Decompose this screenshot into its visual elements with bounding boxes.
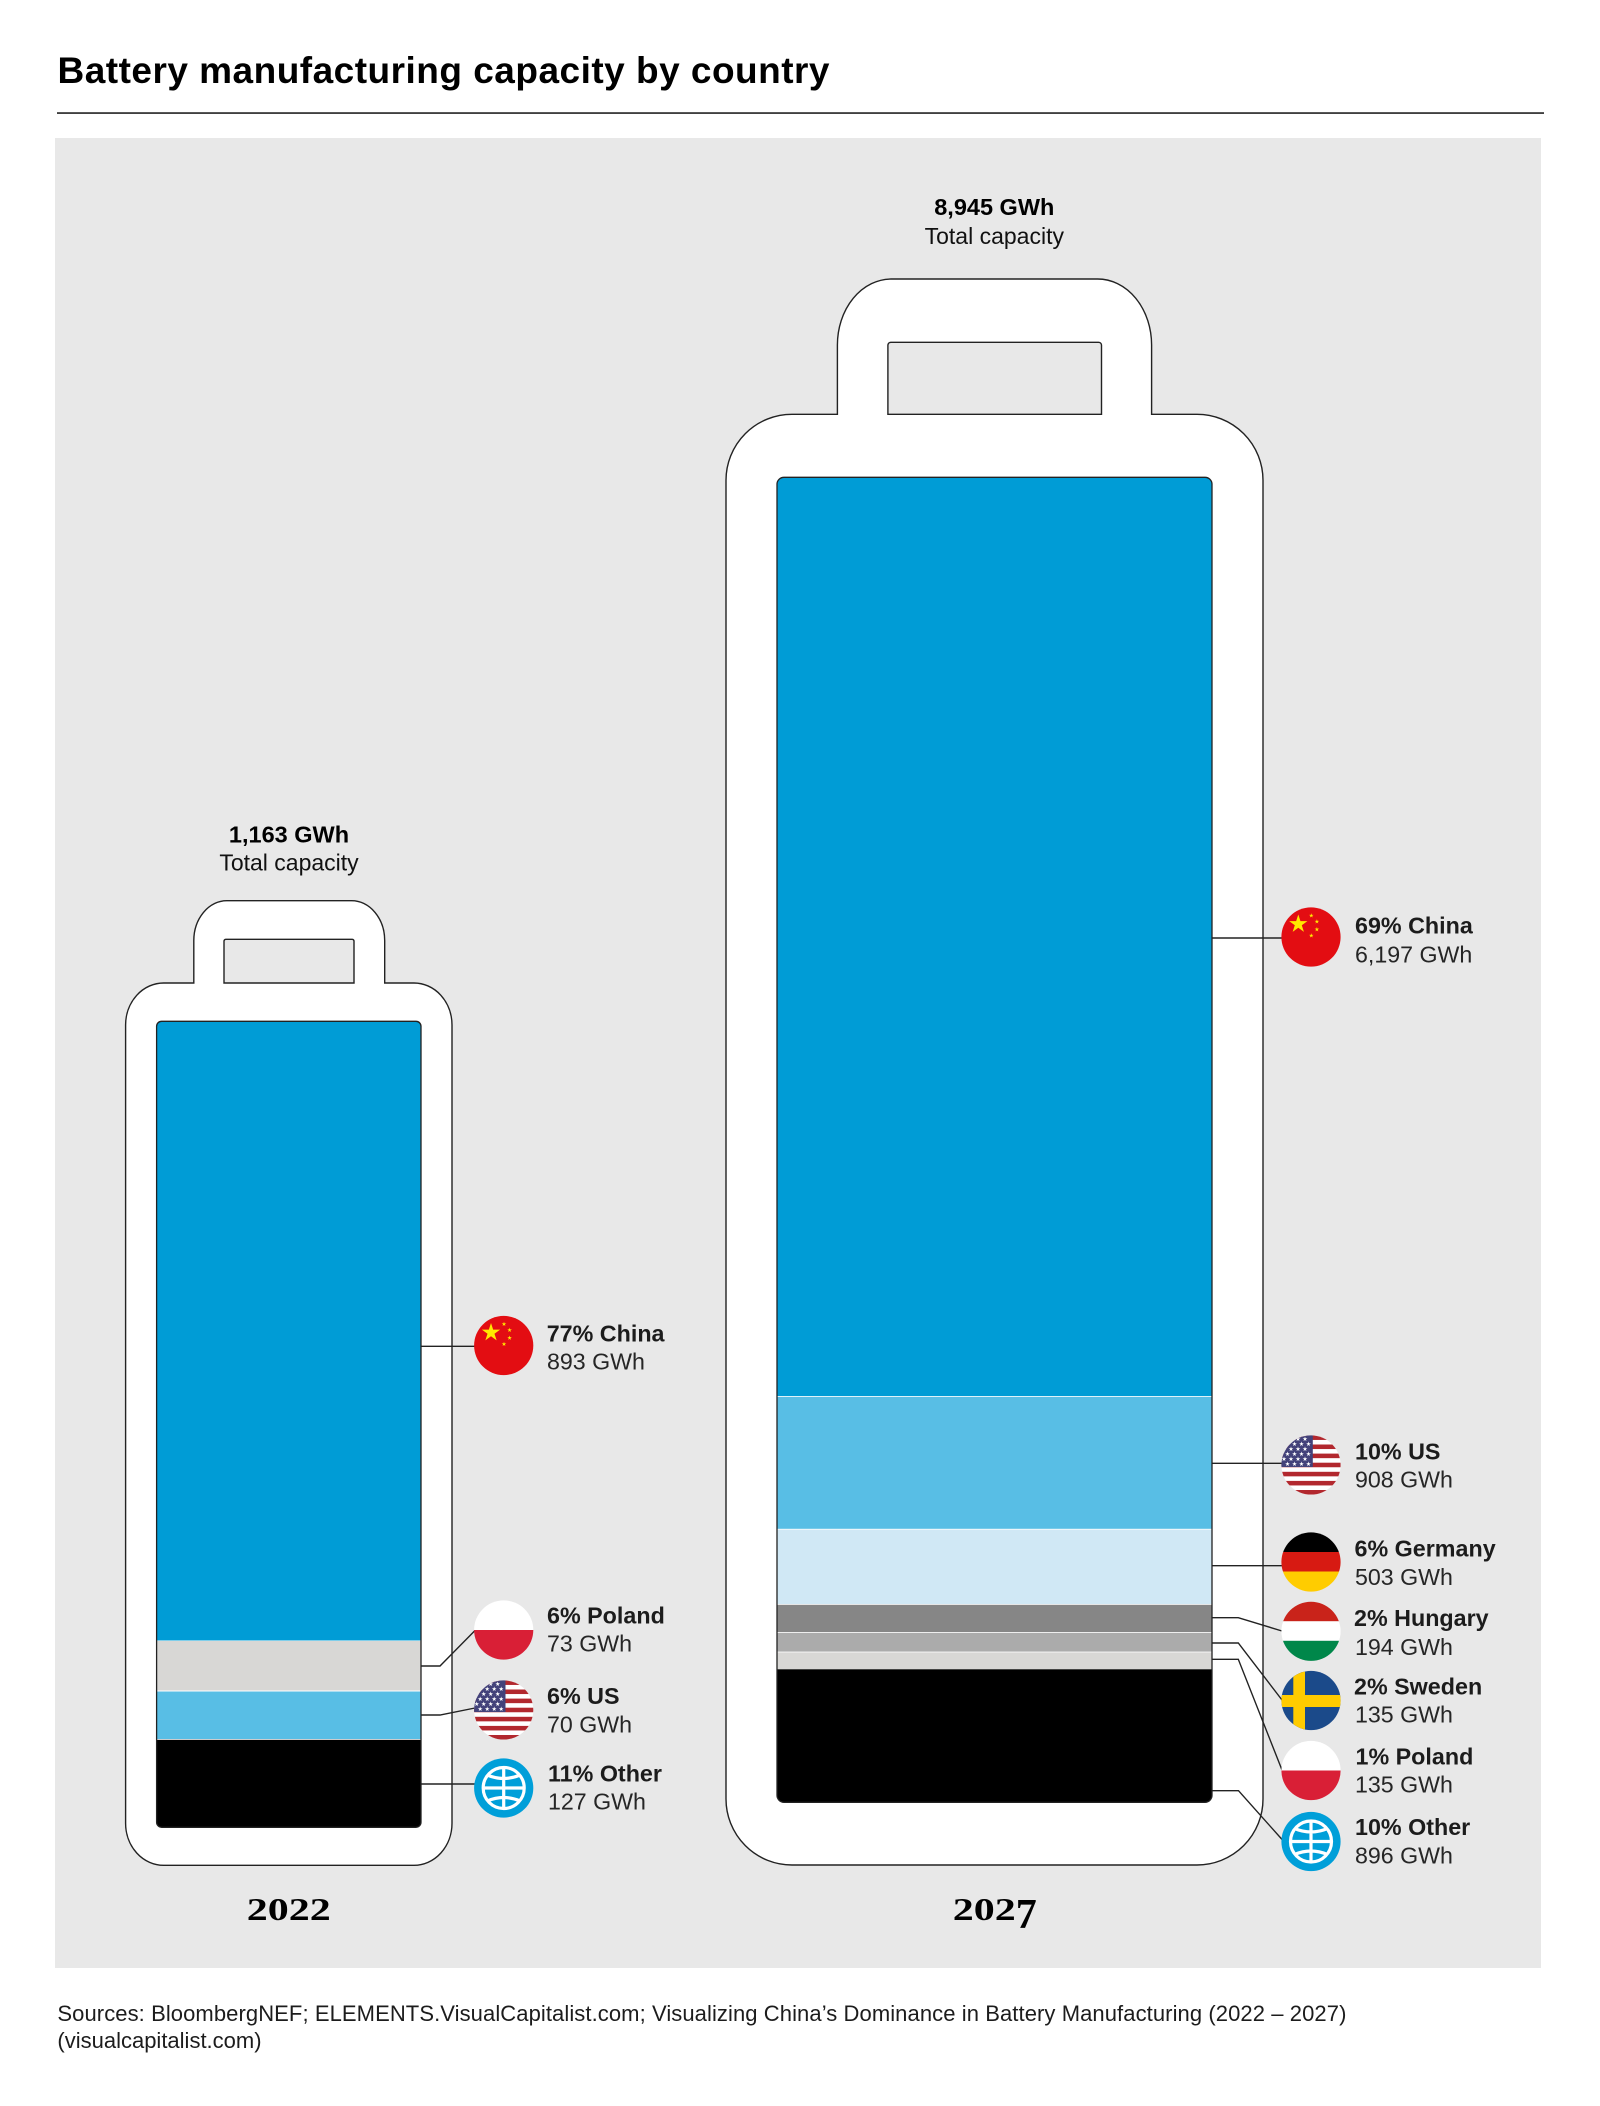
battery casing 2027 (726, 279, 1263, 1865)
callout: Other 2027: 896 GWh (1355, 1842, 1453, 1868)
callout: Other 2022 (474, 1758, 662, 1818)
callout: Sweden 2027: 135 GWh (1355, 1702, 1453, 1728)
callout: Germany 2027: 503 GWh (1355, 1564, 1453, 1590)
callout: China 2027: 69% China (1355, 912, 1474, 938)
stacked capacity bar 2027 (776, 477, 1213, 1803)
connector lines 2022 (421, 1346, 475, 1784)
callout: Hungary 2027 (1281, 1601, 1489, 1662)
sources (57, 2001, 1346, 2053)
callout: China 2027 (1281, 907, 1474, 967)
callout: US 2022: 6% US (547, 1683, 620, 1709)
callout: China 2022: 893 GWh (547, 1348, 645, 1374)
callout: Sweden 2027: 2% Sweden (1354, 1674, 1482, 1700)
callout: Other 2022: 127 GWh (548, 1788, 646, 1814)
callout: Hungary 2027: 2% Hungary (1354, 1605, 1489, 1631)
year label 2027 (953, 1892, 1037, 1938)
stacked capacity bar 2022 (156, 1021, 422, 1828)
total label 2027: Total capacity (925, 223, 1064, 249)
battery terminal window 2022 (224, 939, 354, 983)
callout: US 2027 (1281, 1435, 1453, 1495)
total label 2022: 1,163 GWh (229, 822, 349, 848)
callout: US 2027: 10% US (1355, 1438, 1440, 1464)
battery terminal window 2027 (888, 342, 1102, 414)
callout: Poland 2022: 6% Poland (547, 1602, 665, 1628)
sources: Sources: BloombergNEF; ELEMENTS.VisualCapitalist.com; Visualizing China’s Dominance in Battery Manufacturing (2022 – 2027) (57, 2001, 1346, 2026)
callout: US 2022: 70 GWh (547, 1711, 632, 1737)
callout: Poland 2022: 73 GWh (547, 1631, 632, 1657)
callout: US 2022 (474, 1680, 632, 1740)
year label 2022: 2022 (247, 1893, 331, 1928)
callout: China 2027: 6,197 GWh (1355, 941, 1472, 967)
callout: Other 2027: 10% Other (1355, 1814, 1470, 1840)
year label 2027: 202 (953, 1893, 1016, 1928)
callout: Poland 2027 (1281, 1740, 1473, 1800)
callout: Poland 2027: 1% Poland (1356, 1743, 1473, 1769)
callout: Poland 2027: 135 GWh (1355, 1772, 1453, 1798)
battery casing 2022 (126, 901, 452, 1865)
callout: Poland 2022 (474, 1600, 665, 1660)
total label 2022 (219, 822, 359, 876)
battery: 2022 (126, 901, 452, 1865)
battery: 2027 (726, 279, 1263, 1865)
callout: Germany 2027: 6% Germany (1354, 1536, 1496, 1562)
callout: Other 2022: 11% Other (548, 1761, 662, 1787)
sources: (visualcapitalist.com) (57, 2028, 262, 2053)
total label 2022: Total capacity (219, 850, 359, 876)
callout: US 2027: 908 GWh (1355, 1467, 1453, 1493)
callout: China 2022 (474, 1316, 666, 1376)
total label 2027: 8,945 GWh (934, 194, 1054, 220)
callout: Hungary 2027: 194 GWh (1355, 1634, 1453, 1660)
total label 2027 (925, 194, 1064, 249)
callout: Sweden 2027 (1281, 1670, 1482, 1730)
year label 2027: 7 (1016, 1892, 1037, 1938)
title: Battery manufacturing capacity by country (58, 50, 830, 91)
callout: Germany 2027 (1281, 1532, 1496, 1592)
callout: Other 2027 (1281, 1812, 1470, 1871)
callout: China 2022: 77% China (547, 1321, 666, 1347)
connector lines 2027 (1212, 938, 1282, 1840)
